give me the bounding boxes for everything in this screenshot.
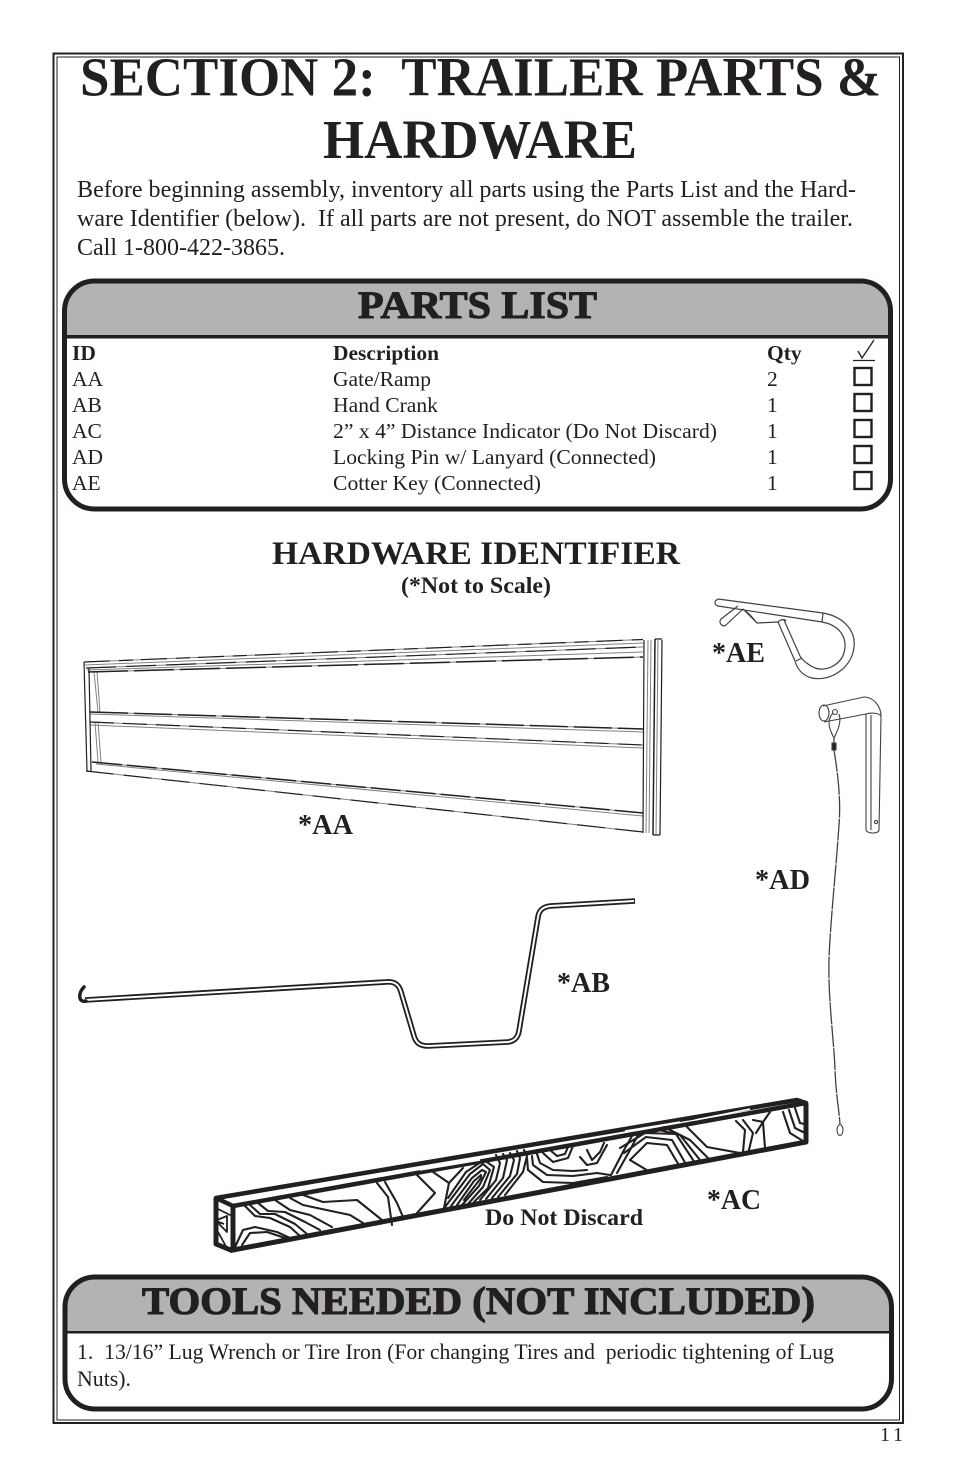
title bbox=[80, 46, 881, 170]
board outline bbox=[216, 1100, 806, 1251]
illustration: cotter key AE bbox=[715, 599, 854, 679]
intro text block: Call 1-800-422-3865. bbox=[77, 235, 285, 261]
tools body text bbox=[77, 1339, 834, 1391]
page number: 11 bbox=[880, 1424, 903, 1446]
tools header band bbox=[65, 1277, 891, 1331]
label: AA: *AA bbox=[298, 809, 353, 841]
parts table: Qty bbox=[767, 341, 802, 365]
parts table: AC bbox=[72, 419, 102, 443]
parts table: AB bbox=[72, 393, 102, 417]
parts table: 1 bbox=[767, 471, 778, 495]
parts table: Cotter Key (Connected) bbox=[333, 471, 541, 495]
label: AD: *AD bbox=[755, 864, 810, 896]
parts list panel outline bbox=[64, 281, 890, 509]
parts list header band bbox=[64, 282, 890, 336]
parts table: Locking Pin w/ Lanyard (Connected) bbox=[333, 445, 656, 469]
parts table: AA bbox=[72, 367, 104, 391]
label: AB: *AB bbox=[557, 967, 610, 999]
illustration: hand crank AB bbox=[80, 901, 635, 1046]
tools body text: Nuts). bbox=[77, 1366, 131, 1391]
hardware identifier heading: HARDWARE IDENTIFIER bbox=[272, 536, 681, 572]
wood grain bbox=[235, 1108, 804, 1247]
title: HARDWARE bbox=[323, 109, 637, 170]
intro text block bbox=[77, 177, 856, 261]
icon: check mark column header bbox=[853, 340, 875, 360]
parts table: Hand Crank bbox=[333, 393, 438, 417]
tools body text: 1. 13/16” Lug Wrench or Tire Iron (For changing Tires and periodic tightening of Lug bbox=[77, 1339, 834, 1364]
parts table: AD bbox=[72, 445, 103, 469]
illustration: gate/ramp AA bbox=[84, 639, 662, 835]
parts table: 1 bbox=[767, 393, 778, 417]
parts table: 1 bbox=[767, 419, 778, 443]
parts list header rule bbox=[64, 335, 891, 338]
title: SECTION 2: TRAILER PARTS & bbox=[80, 46, 881, 108]
top face highlights bbox=[270, 1109, 750, 1194]
intro text block: ware Identifier (below). If all parts are not present, do NOT assemble the trailer. bbox=[77, 206, 853, 232]
panel: tools needed bbox=[64, 1277, 892, 1409]
parts list heading: PARTS LIST bbox=[358, 284, 597, 327]
parts table: Description bbox=[333, 341, 439, 365]
parts table: Gate/Ramp bbox=[333, 367, 431, 391]
tools heading: TOOLS NEEDED (NOT INCLUDED) bbox=[142, 1280, 815, 1323]
parts table: 1 bbox=[767, 445, 778, 469]
hardware identifier heading bbox=[272, 536, 681, 598]
tools panel outline bbox=[65, 1277, 892, 1409]
tools header rule bbox=[64, 1331, 892, 1334]
label: AE: *AE bbox=[712, 637, 765, 669]
parts table: AE bbox=[72, 471, 101, 495]
label: AC: *AC bbox=[707, 1184, 761, 1216]
parts table: ID bbox=[72, 341, 96, 365]
parts table: 2” x 4” Distance Indicator (Do Not Discard) bbox=[333, 419, 717, 443]
illustration: locking pin with lanyard AD bbox=[819, 697, 881, 1136]
panel: parts list bbox=[64, 281, 891, 509]
checkboxes bbox=[854, 368, 872, 489]
parts table bbox=[72, 341, 802, 495]
illustration: distance indicator AC bbox=[216, 1100, 806, 1251]
hardware identifier heading: (*Not to Scale) bbox=[401, 573, 551, 598]
intro text block: Before beginning assembly, inventory all parts using the Parts List and the Hard- bbox=[77, 177, 856, 203]
parts table: 2 bbox=[767, 367, 778, 391]
label: do not discard: Do Not Discard bbox=[485, 1205, 643, 1231]
